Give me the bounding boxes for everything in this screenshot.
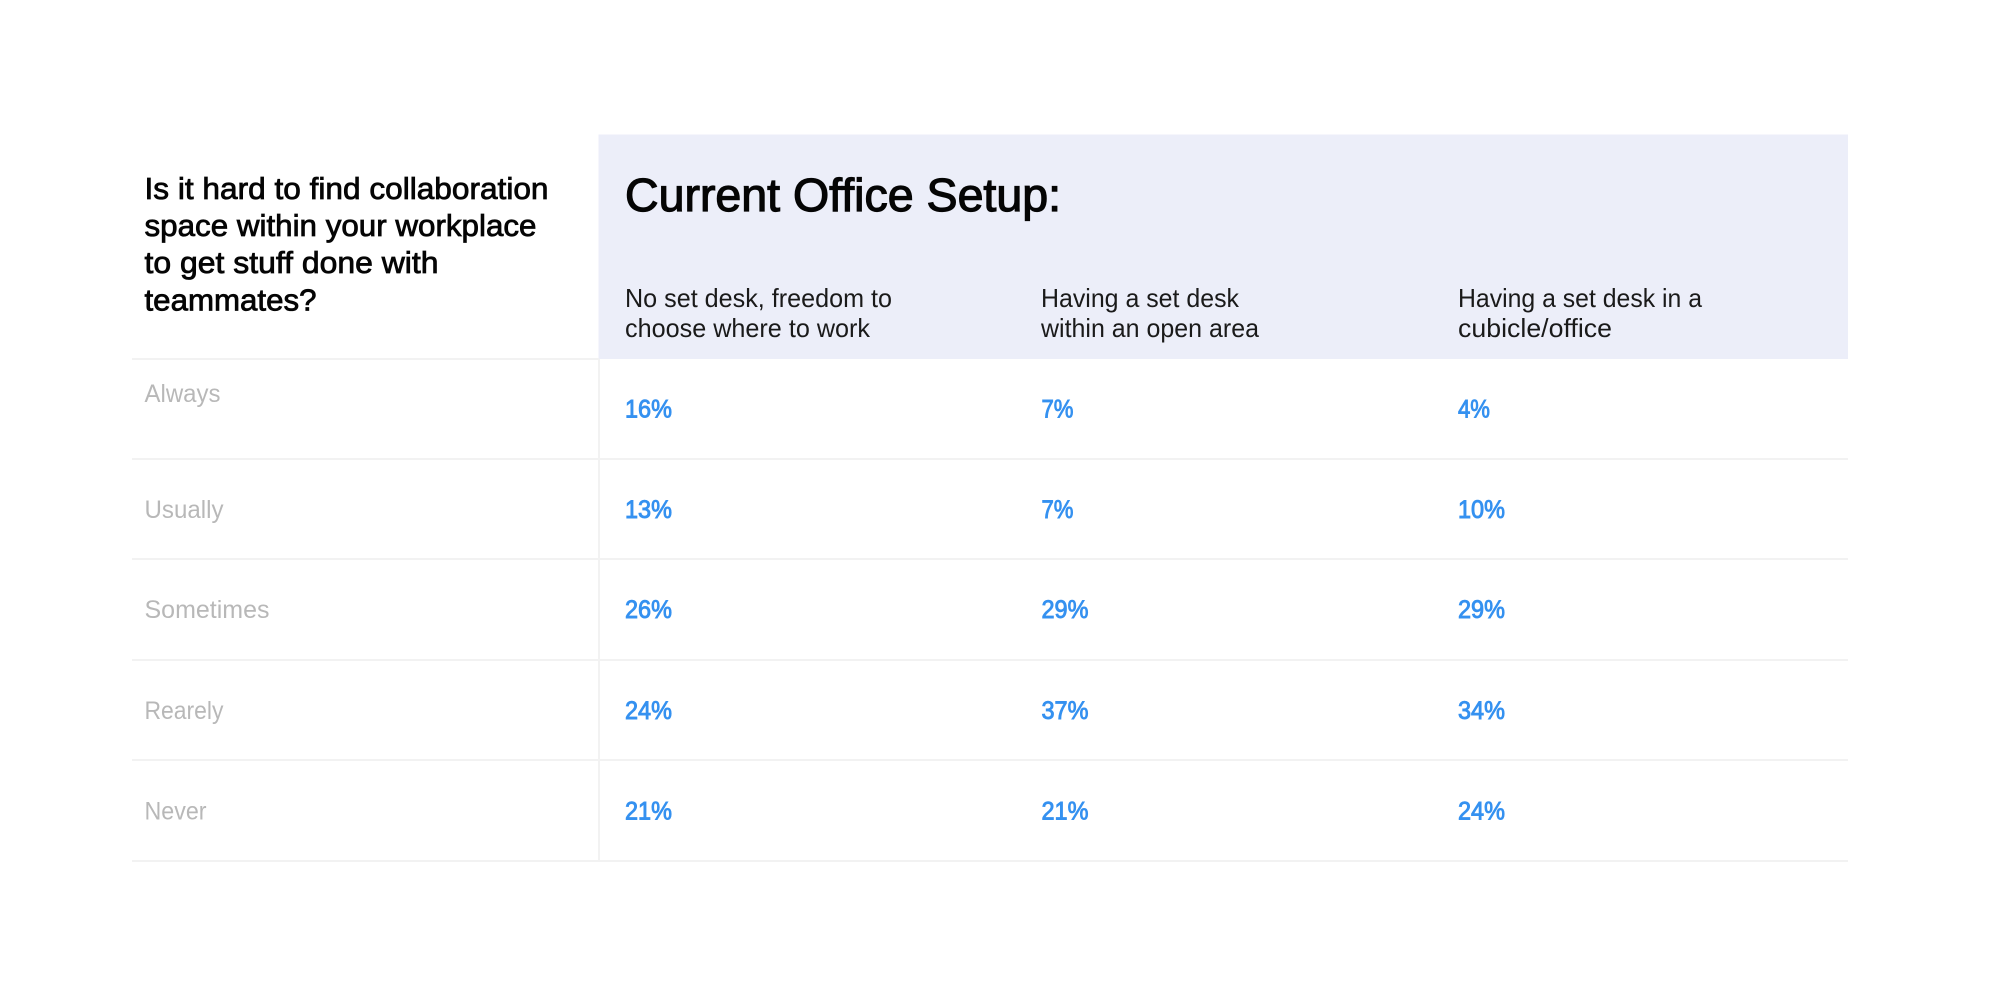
row: never: 24% [1458, 798, 1505, 826]
row: never [144, 798, 1505, 826]
row: rearely: 37% [1042, 697, 1088, 725]
row: sometimes [144, 596, 1505, 624]
row: always: 7% [1042, 396, 1074, 424]
row: usually [144, 496, 1505, 524]
column header: set desk in open area [1040, 283, 1260, 343]
column header: no set desk [625, 283, 892, 343]
row: always: 4% [1458, 396, 1490, 424]
question heading: to get stuff done with [144, 245, 438, 280]
row: never: Never [144, 798, 206, 826]
column header: set desk in open area: Having a set desk [1041, 283, 1240, 313]
column header: set desk in cubicle: Having a set desk in a [1458, 283, 1703, 313]
row: sometimes: 29% [1458, 596, 1505, 624]
row: usually: 7% [1042, 496, 1074, 524]
row: usually: 13% [625, 496, 672, 524]
row: never: 21% [1042, 798, 1088, 826]
row: always: 16% [625, 396, 672, 424]
row: sometimes: 29% [1042, 596, 1088, 624]
row: never: 21% [625, 798, 672, 826]
row: rearely: 34% [1458, 697, 1505, 725]
row: rearely: Rearely [144, 697, 224, 725]
question heading: teammates? [144, 282, 316, 318]
column header: no set desk: choose where to work [625, 313, 871, 343]
row: rearely [144, 697, 1505, 725]
row: usually: 10% [1458, 496, 1505, 524]
row: always [144, 380, 1490, 424]
panel: current office setup header [598, 134, 1848, 359]
row: always: Always [144, 380, 220, 408]
column header: set desk in cubicle [1458, 283, 1703, 343]
row: sometimes: 26% [625, 596, 672, 624]
row: usually: Usually [144, 496, 224, 524]
column header: no set desk: No set desk, freedom to [625, 283, 892, 313]
row: sometimes: Sometimes [144, 596, 270, 624]
question heading: Is it hard to find collaboration [144, 171, 548, 206]
question heading: space within your workplace [144, 208, 536, 243]
column header: set desk in open area: within an open area [1040, 313, 1260, 343]
column header: set desk in cubicle: cubicle/office [1458, 313, 1612, 343]
panel title: Current Office Setup: [625, 169, 1061, 221]
question heading [144, 171, 548, 318]
row: rearely: 24% [625, 697, 672, 725]
